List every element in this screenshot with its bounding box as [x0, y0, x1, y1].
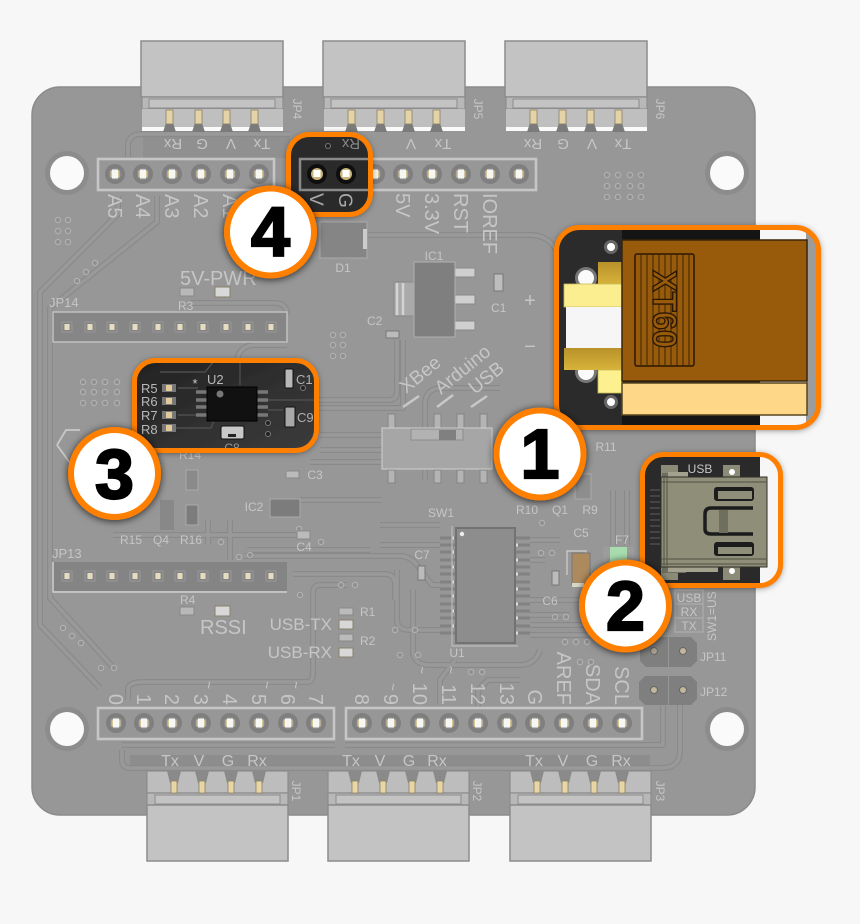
switch labels: Arduino [431, 341, 495, 399]
circuit board [32, 41, 755, 861]
number badge 3 [71, 430, 158, 517]
header: analog pins: A4 [131, 194, 153, 218]
polarity marks [524, 290, 536, 358]
capacitors: C1 [296, 372, 313, 387]
capacitors [221, 369, 314, 455]
header: power pins [300, 159, 536, 254]
regulator IC1 [367, 249, 507, 338]
mounting holes [45, 151, 749, 751]
gold terminals [564, 262, 622, 393]
bottom connector labels [161, 753, 667, 802]
top connector labels: V [587, 135, 597, 152]
bottom Molex connectors [147, 771, 651, 861]
number badge 3: 3 [95, 435, 134, 513]
header: digital pins 0-7: ~ [259, 681, 275, 689]
polarity marks: + [524, 290, 536, 312]
mounting pads [661, 465, 740, 580]
header: analog pins: A1 [218, 194, 240, 218]
silkscreen labels near transistors: Q4 [153, 533, 169, 547]
RSSI LED group [180, 593, 247, 639]
bottom connector labels: Rx [427, 753, 447, 770]
top connector labels: JP5 [471, 99, 485, 120]
bottom connector labels: JP2 [470, 781, 484, 802]
bottom connector labels: G [222, 753, 234, 770]
header: digital pins 0-7: 1 [132, 694, 154, 705]
regulator IC1: C2 [367, 314, 383, 328]
diode D1: D1 [335, 261, 351, 275]
header: digital pins 8-13: SDA [581, 664, 603, 706]
number badge 1: 1 [521, 415, 559, 493]
silkscreen labels near transistors: IC2 [245, 500, 264, 514]
header: digital pins 0-7: 7 [304, 694, 326, 705]
header: digital pins 0-7: ~ [201, 681, 217, 689]
bottom connector labels: G [403, 753, 415, 770]
solder jumper labels [675, 590, 719, 641]
silkscreen labels near transistors: C4 [296, 540, 312, 554]
number badge 2: 2 [606, 567, 645, 645]
slide switch SW1: SW1 [428, 506, 454, 520]
USB LEDs: USB-RX [268, 643, 332, 662]
switch labels [396, 341, 509, 407]
top connector labels: Rx [163, 135, 182, 152]
fuse F7: F7 [615, 533, 629, 547]
microcontroller U1: C7 [414, 548, 430, 562]
header JP14: JP14 [49, 295, 79, 310]
number badge 2 [582, 562, 669, 650]
header: power pins: 3.3V [420, 193, 442, 235]
top connector labels: JP6 [653, 99, 667, 120]
solder holes [575, 240, 618, 409]
chip U2: * [192, 376, 198, 391]
header: digital pins 8-13: SCL [610, 666, 632, 705]
vias [55, 172, 644, 675]
number badge 4: 4 [251, 193, 290, 271]
connector shell [661, 472, 767, 573]
5V-PWR LED group: 5V-PWR [180, 268, 257, 290]
top connector labels: Tx [434, 135, 451, 152]
header: digital pins 8-13: ~ [443, 666, 459, 674]
panel 1: XT60 power connector [556, 227, 820, 428]
solder jumper labels: TX [681, 619, 697, 633]
header: digital pins 8-13: ~ [385, 683, 401, 691]
silkscreen labels near transistors: R11 [595, 440, 617, 454]
bottom connector labels: Tx [342, 753, 360, 770]
microcontroller U1: U1 [449, 646, 465, 660]
header: digital pins 8-13: AREF [552, 652, 574, 705]
header: digital pins 8-13: 11 [437, 684, 459, 705]
header: digital pins 8-13: 9 [379, 694, 401, 705]
header: digital pins 8-13 [346, 652, 642, 739]
bottom connector labels: G [586, 753, 598, 770]
header: digital pins 0-7 [98, 681, 334, 739]
bottom connector labels: V [194, 753, 205, 770]
header: digital pins 0-7: 6 [276, 694, 298, 705]
resistors R5-R8: R8 [141, 422, 158, 437]
USB LEDs: R1 [360, 605, 376, 619]
resistors R5-R8: R5 [141, 381, 158, 396]
capacitors C5 and C6: C6 [542, 594, 558, 608]
jumpers JP11 and JP12: JP11 [700, 650, 727, 664]
panel 4: power pins V and G [288, 134, 380, 214]
USB LEDs: USB-TX [270, 615, 332, 634]
top connector labels: Rx [523, 135, 542, 152]
top connector labels: Tx [614, 135, 631, 152]
capacitors: C8 [224, 441, 240, 455]
header JP13: JP13 [52, 546, 82, 561]
panel 4: power pins V and G: V [305, 193, 326, 206]
slide switch SW1 [382, 414, 492, 520]
capacitors C5 and C6: C5 [573, 526, 589, 540]
outline left of badge 3 [57, 430, 80, 470]
header JP14 [49, 295, 287, 342]
header: digital pins 0-7: ~ [288, 681, 304, 689]
header: digital pins 8-13: 8 [350, 694, 372, 705]
resistors R5-R8: R7 [141, 408, 158, 423]
header JP13 [52, 546, 287, 592]
switch labels: USB [465, 358, 509, 399]
silkscreen labels near transistors: Q1 [552, 503, 568, 517]
regulator IC2 [270, 471, 310, 539]
silkscreen labels near transistors: R16 [180, 533, 202, 547]
solder jumper labels: RX [681, 605, 697, 619]
silkscreen labels near transistors: R14 [179, 448, 201, 462]
transistor components [160, 470, 591, 530]
top connector labels: G [196, 135, 208, 152]
capacitors: C9 [297, 410, 314, 425]
header: digital pins 0-7: 3 [189, 694, 211, 705]
panel 2: USB connector: USB [688, 462, 712, 476]
polarity marks: − [524, 336, 536, 358]
solder jumper labels: USB [677, 591, 701, 605]
regulator IC1: C1 [491, 301, 507, 315]
panel 4: power pins V and G: Rx [341, 135, 360, 152]
header: analog pins: A2 [189, 194, 211, 218]
header: power pins: IOREF [478, 193, 500, 254]
top connector labels: V [226, 135, 236, 152]
regulator IC1: IC1 [425, 249, 444, 263]
top connector labels [163, 99, 667, 152]
header: digital pins 8-13: ~ [414, 666, 430, 674]
header: analog pins: A3 [160, 194, 182, 218]
chip U2 [192, 372, 268, 421]
copper traces [40, 134, 680, 768]
header: digital pins 8-13: 10 [408, 683, 430, 705]
header: digital pins 0-7: 0 [104, 694, 126, 705]
header: power pins: RST [449, 193, 471, 233]
jumpers JP11 and JP12 [639, 637, 728, 705]
bottom connector labels: V [375, 753, 386, 770]
top connector labels: Tx [253, 135, 270, 152]
panel 3: IC U2 [134, 360, 318, 455]
header: digital pins 0-7: 2 [160, 694, 182, 705]
header: digital pins 8-13: 13 [495, 683, 517, 705]
bottom connector labels: Tx [161, 753, 179, 770]
RSSI LED group: R4 [180, 593, 196, 607]
header: digital pins 8-13: G [523, 689, 545, 705]
top connector labels: G [557, 135, 569, 152]
header: analog pins: A5 [103, 194, 125, 218]
number badge 1 [496, 410, 584, 498]
USB LEDs: R2 [360, 634, 376, 648]
silkscreen labels near transistors: R9 [582, 503, 598, 517]
panel 2: USB connector [642, 454, 784, 588]
chip U2: U2 [207, 372, 224, 387]
capacitors C5 and C6 [542, 526, 590, 608]
resistors R5-R8: R6 [141, 394, 158, 409]
bottom connector labels: Tx [525, 753, 543, 770]
number badge 4 [227, 188, 314, 276]
fuse F7 [603, 533, 634, 565]
bottom connector labels: Rx [611, 753, 631, 770]
header: power pins: 5V [391, 193, 413, 218]
bottom connector labels: JP3 [653, 781, 667, 802]
bottom connector labels: JP1 [289, 781, 303, 802]
diode D1 [320, 222, 367, 275]
header: digital pins 0-7: 5 [247, 694, 269, 705]
panel 4: power pins V and G: G [334, 193, 355, 208]
header: digital pins 8-13: 12 [466, 683, 488, 705]
top connector labels: V [406, 135, 416, 152]
RSSI LED group: RSSI [200, 617, 247, 639]
solder jumper labels: SW1=US [705, 591, 719, 641]
USB LEDs [268, 605, 376, 662]
jumpers JP11 and JP12: JP12 [700, 685, 728, 699]
bottom connector labels: V [558, 753, 569, 770]
connector housing [622, 240, 807, 415]
silkscreen labels near transistors: C3 [307, 468, 323, 482]
top Molex connectors [141, 41, 647, 132]
top connector labels: JP4 [290, 99, 304, 120]
header: analog pins [98, 159, 274, 218]
resistors R5-R8 [142, 384, 176, 434]
bottom connector labels: Rx [247, 753, 267, 770]
5V-PWR LED group [178, 268, 257, 313]
silkscreen labels near transistors [120, 440, 617, 554]
header: digital pins 0-7: 4 [218, 694, 240, 705]
silkscreen labels near transistors: R10 [516, 503, 538, 517]
microcontroller U1 [414, 526, 530, 660]
5V-PWR LED group: R3 [178, 299, 194, 313]
silkscreen labels near transistors: R15 [120, 533, 142, 547]
connector housing: XT60 [645, 270, 683, 348]
switch labels: XBee [396, 352, 445, 398]
